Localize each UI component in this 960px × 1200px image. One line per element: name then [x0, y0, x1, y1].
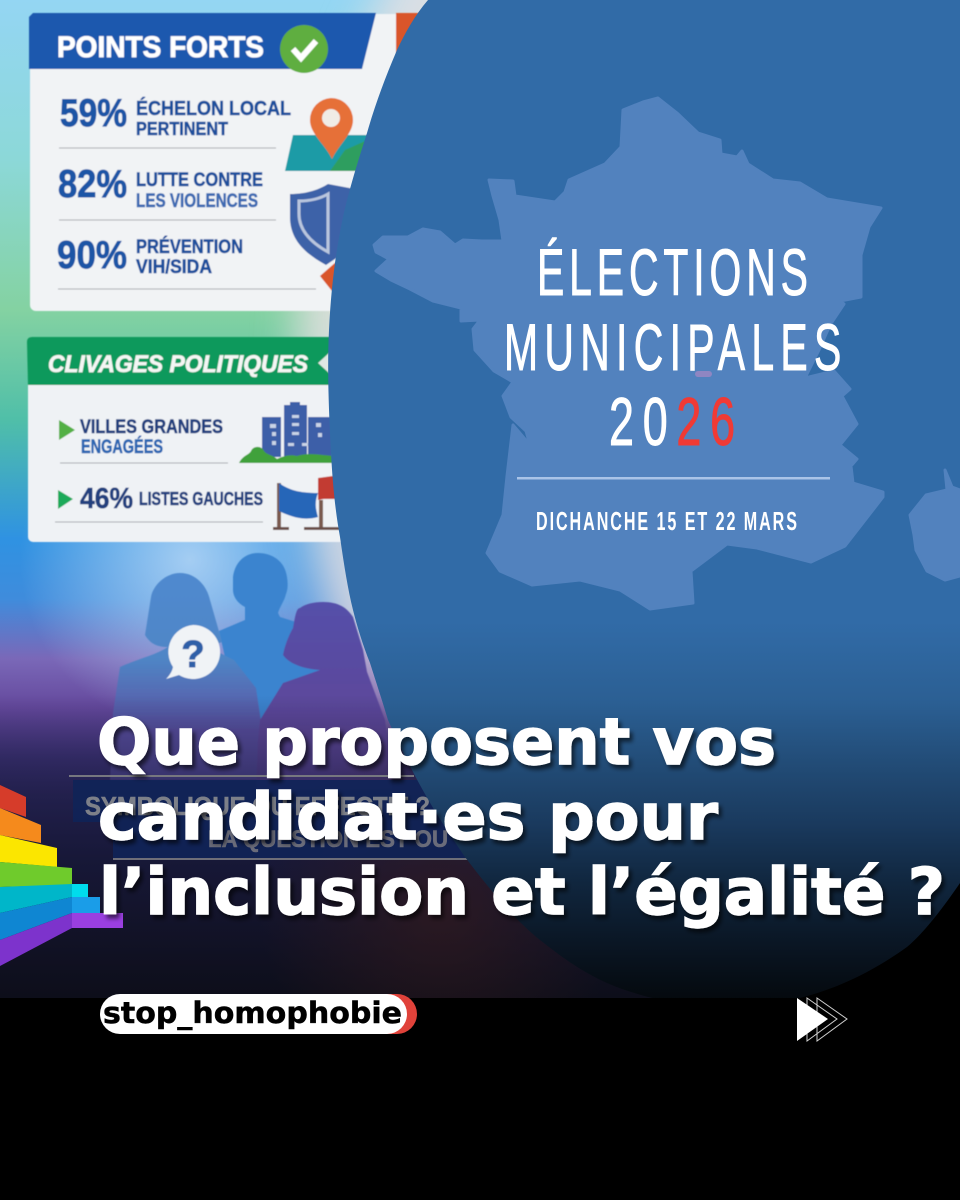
headline line 1: Que proposent vos	[97, 706, 776, 780]
title: élections municipales 2026	[504, 235, 841, 460]
stat: 82%: LUTTE CONTRE	[136, 170, 263, 191]
corsica	[910, 470, 960, 580]
panel: symbolique banner: LA QUESTION EST OU	[208, 826, 448, 853]
icon: question bubble: ?	[181, 634, 205, 676]
footer black band	[0, 998, 960, 1200]
row: 46% listes gauches: LISTES GAUCHES	[139, 489, 263, 509]
small mark	[695, 371, 712, 377]
icon: shield	[290, 184, 360, 291]
brown tint lower right	[260, 730, 700, 1000]
stat: 59%: PERTINENT	[136, 119, 228, 139]
header band	[27, 337, 345, 385]
row: villes grandes: VILLES GRANDES	[80, 417, 223, 438]
heading: points forts: POINTS FORTS	[57, 31, 264, 64]
row: 46% listes gauches: 46%	[80, 483, 133, 515]
icon: question bubble	[166, 625, 220, 679]
mainland	[374, 98, 883, 609]
handle pill: stop_homophobie	[103, 996, 402, 1030]
stat: 82%: 82%	[58, 163, 127, 206]
date line: DICHANCHE 15 ET 22 MARS	[536, 506, 797, 536]
silhouette: woman	[110, 573, 262, 780]
stat: 82%	[58, 163, 276, 220]
map of France	[374, 98, 960, 609]
icon: next arrows	[797, 998, 847, 1041]
line: élections: ÉLECTIONS	[537, 235, 808, 309]
icon: city	[239, 402, 333, 463]
stat: 90%	[57, 234, 316, 290]
row: villes grandes: ENGAGÉES	[81, 436, 163, 458]
row: 46% listes gauches	[55, 483, 263, 522]
stat: 90%: 90%	[57, 234, 127, 277]
icon: check badge	[280, 25, 328, 73]
stat: 82%: LES VIOLENCES	[136, 191, 258, 212]
line: municipales: MUNICIPALES	[504, 310, 841, 384]
panel: blue ellipse	[328, 0, 960, 1006]
icon: white diamond	[318, 352, 345, 374]
stat: 90%: PRÉVENTION	[136, 236, 243, 258]
icon: orange tab	[396, 13, 424, 54]
pale glow beside ellipse	[271, 0, 428, 738]
card background	[30, 14, 430, 311]
card background	[28, 337, 428, 542]
headline	[97, 706, 945, 930]
image darkening	[0, 695, 700, 1000]
black corner behind ellipse	[700, 800, 960, 1000]
stat: 90%: VIH/SIDA	[136, 257, 212, 278]
line: 2026: 2026	[609, 385, 735, 460]
silhouette: man	[219, 553, 329, 723]
panel: points forts	[29, 13, 430, 311]
logo: rainbow stairs	[0, 785, 123, 966]
icon: map pin	[285, 98, 372, 171]
stat: 59%	[59, 92, 291, 148]
headline line 2: candidat·es pour	[98, 781, 718, 855]
panel: symbolique banner	[69, 775, 480, 860]
heading: clivages politiques: CLIVAGES POLITIQUES	[48, 351, 308, 378]
panel: symbolique banner: SYMBOLIQUE OU EFFECTIF ?	[85, 791, 430, 821]
panel: clivages politiques	[27, 337, 428, 542]
row: villes grandes	[59, 417, 228, 464]
light patch behind silhouettes	[0, 380, 400, 720]
illustration: silhouettes	[110, 553, 393, 790]
stat: 59%: ÉCHELON LOCAL	[136, 97, 291, 120]
header band	[29, 13, 376, 69]
icon: flags	[273, 475, 340, 530]
stat: 59%: 59%	[60, 92, 127, 135]
divider rule	[517, 477, 830, 480]
silhouette: third person	[256, 602, 393, 790]
headline line 3: l’inclusion et l’égalité ?	[99, 856, 945, 930]
